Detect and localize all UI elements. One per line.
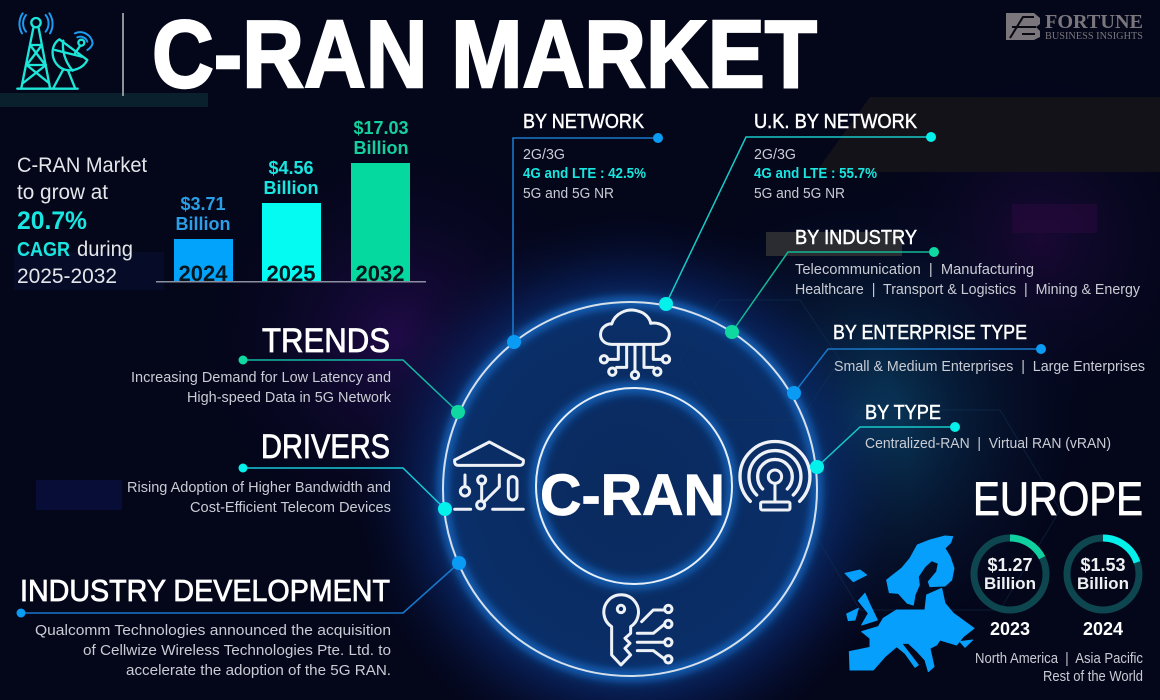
panel: UK by network <box>659 111 936 311</box>
panel: trends: Increasing Demand for Low Latency and <box>131 369 391 386</box>
panel: UK by network: 4G and LTE : 55.7% <box>754 166 877 182</box>
bar chart: 2032 <box>356 261 404 286</box>
title: C-RAN MARKET <box>152 1 817 108</box>
bar chart: $3.71 <box>180 194 226 214</box>
icon: bank circuit <box>455 442 523 509</box>
bar chart: $4.56 <box>268 158 314 178</box>
icon: Europe map <box>845 536 974 672</box>
panel: by industry: BY INDUSTRY <box>795 227 917 249</box>
bar chart: Billion <box>176 214 230 234</box>
panel: by industry <box>725 227 1140 339</box>
panel: by industry: Telecommunication | Manufacturing <box>795 261 1034 278</box>
donut chart: 2023: $1.27 <box>987 555 1033 575</box>
CAGR text block <box>17 154 147 288</box>
center label: C-RAN <box>540 463 725 528</box>
other regions <box>975 650 1143 685</box>
panel: drivers: Cost-Efficient Telecom Devices <box>190 499 391 516</box>
panel: industry development <box>16 556 466 679</box>
panel: drivers <box>127 428 452 516</box>
panel: UK by network: 5G and 5G NR <box>754 185 845 202</box>
donut chart: 2023: 2023 <box>990 619 1030 639</box>
panel: by network: BY NETWORK <box>523 111 645 133</box>
donut chart: 2024: $1.53 <box>1080 555 1126 575</box>
panel: trends <box>131 322 465 419</box>
panel: industry development: accelerate the adoption of the 5G RAN. <box>126 662 391 679</box>
panel: by enterprise type <box>787 322 1145 400</box>
panel: by network <box>507 111 663 349</box>
central rings <box>443 302 817 676</box>
bar chart <box>156 118 426 286</box>
panel: drivers: Rising Adoption of Higher Bandwidth and <box>127 479 391 496</box>
donut chart: 2024 <box>1067 538 1139 639</box>
bar chart: $17.03 <box>353 118 409 138</box>
panel: by type: BY TYPE <box>865 402 941 424</box>
panel: trends: TRENDS <box>262 322 390 360</box>
panel: by type: Centralized-RAN | Virtual RAN (vRAN) <box>865 435 1111 452</box>
logo: Fortune Business Insights: BUSINESS INSIGHTS <box>1045 31 1143 42</box>
icon: signal antenna <box>740 441 810 510</box>
bar chart: 2025 <box>267 261 315 286</box>
icon: tower and satellite dish <box>17 13 93 89</box>
divider <box>122 13 124 96</box>
panel: UK by network: U.K. BY NETWORK <box>754 111 918 133</box>
panel: industry development: of Cellwize Wireless Technologies Pte. Ltd. to <box>83 642 391 659</box>
panel: by enterprise type: BY ENTERPRISE TYPE <box>833 322 1027 344</box>
donut chart: 2024: Billion <box>1077 574 1129 593</box>
panel: trends: High-speed Data in 5G Network <box>187 389 391 406</box>
donut chart: 2023 <box>974 538 1046 639</box>
CAGR text block: during <box>77 238 133 261</box>
logo: Fortune Business Insights <box>1006 11 1143 42</box>
bar chart: Billion <box>354 138 408 158</box>
CAGR text block: to grow at <box>17 181 108 204</box>
panel: by enterprise type: Small & Medium Enterprises | Large Enterprises <box>834 358 1145 375</box>
logo: Fortune Business Insights: FORTUNE <box>1045 11 1143 33</box>
panel: by network: 5G and 5G NR <box>523 185 614 202</box>
CAGR text block: CAGR <box>17 239 70 261</box>
CAGR text block: C-RAN Market <box>17 154 147 177</box>
bar chart: 2024 <box>179 261 228 286</box>
donut chart: 2024: 2024 <box>1083 619 1123 639</box>
panel: by type <box>810 402 1111 474</box>
panel: by network: 4G and LTE : 42.5% <box>523 166 646 182</box>
other regions: Rest of the World <box>1043 668 1143 685</box>
panel: industry development: Qualcomm Technologies announced the acquisition <box>35 622 391 639</box>
icon: cloud network <box>600 310 670 379</box>
panel: by industry: Healthcare | Transport & Logistics | Mining & Energy <box>795 281 1140 298</box>
CAGR text block: 20.7% <box>17 207 87 235</box>
donut chart: 2023: Billion <box>984 574 1036 593</box>
panel: industry development: INDUSTRY DEVELOPMENT <box>20 573 390 608</box>
panel: UK by network: 2G/3G <box>754 146 796 163</box>
panel: drivers: DRIVERS <box>261 428 390 466</box>
bar chart: Billion <box>264 178 318 198</box>
icon: key circuit <box>604 595 672 665</box>
CAGR text block: 2025-2032 <box>17 265 117 288</box>
panel: by network: 2G/3G <box>523 146 565 163</box>
